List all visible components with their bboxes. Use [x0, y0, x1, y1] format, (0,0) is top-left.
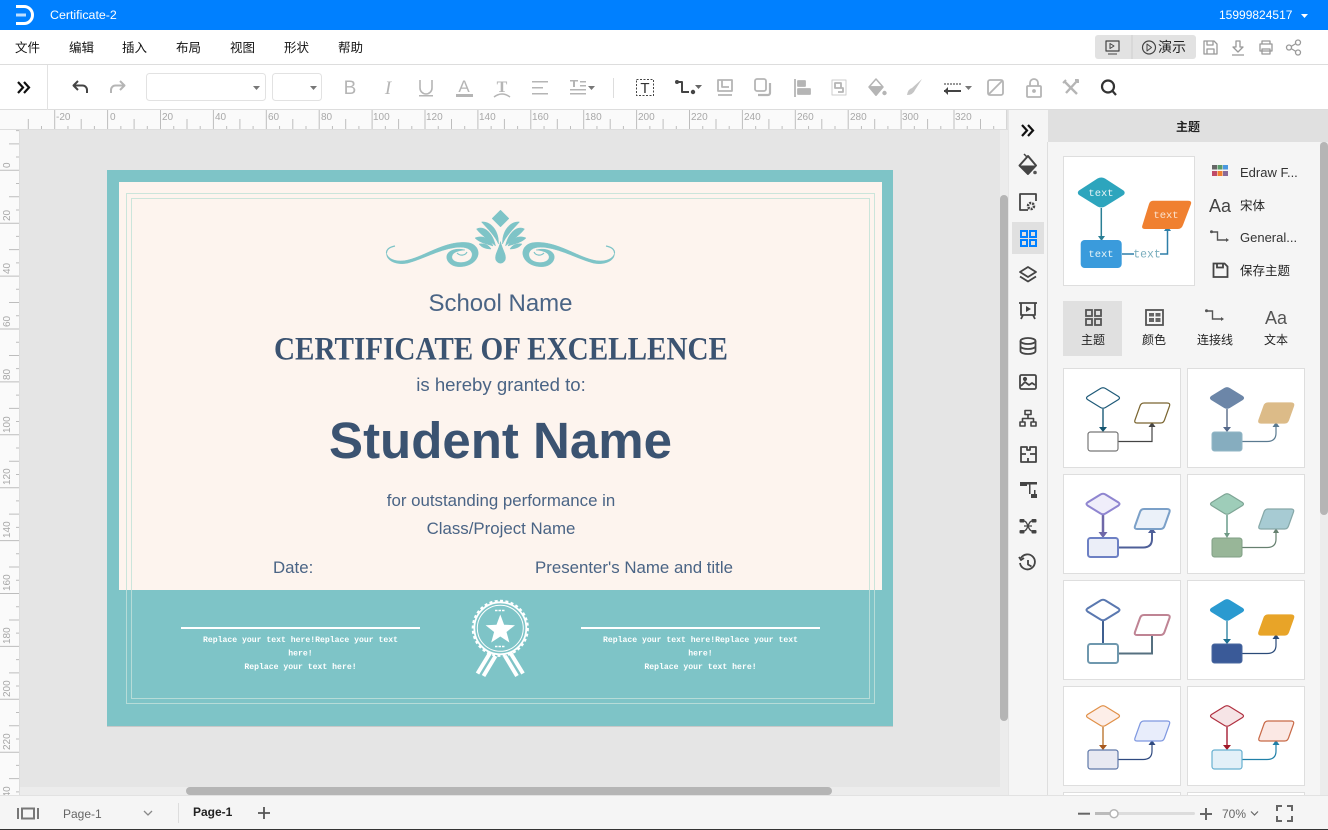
search [1102, 80, 1116, 95]
theme option: save: 保存主题 [1240, 264, 1291, 278]
left ruler [0, 130, 20, 803]
menu bar: 编辑 [69, 40, 94, 55]
theme card 4 [1188, 474, 1304, 574]
theme preview: text [1133, 248, 1161, 262]
menu bar: 视图 [230, 40, 255, 55]
right signature block [581, 627, 820, 672]
top ruler: 240 [744, 112, 761, 123]
left ruler: 240 [2, 786, 13, 803]
theme option: font: 宋体 [1240, 198, 1266, 213]
tab: text: 文本 [1264, 332, 1288, 347]
text format icons: T [497, 79, 508, 96]
top ruler: 60 [268, 112, 280, 123]
tab: theme [1063, 301, 1122, 356]
present button group: 演示 [1158, 39, 1186, 55]
cream panel [119, 182, 882, 590]
left ruler: 160 [2, 574, 13, 591]
text format icons: A [458, 77, 470, 96]
top ruler: 260 [797, 112, 814, 123]
left ruler: 100 [2, 416, 13, 433]
text format icons: I [384, 78, 393, 99]
theme preview: text [1088, 249, 1114, 261]
left signature block: Replace your text here! [244, 662, 357, 672]
left ruler: 80 [2, 368, 13, 380]
right icon column [1008, 110, 1048, 795]
left ruler: 0 [2, 162, 13, 168]
mind map icon [1020, 519, 1036, 534]
arrange icons [718, 79, 922, 97]
presentation icon [1019, 303, 1037, 319]
add page [258, 807, 270, 819]
page panel toggle [18, 808, 38, 819]
tab: connector: 连接线 [1197, 332, 1233, 347]
title bar [0, 0, 1328, 30]
document name: Certificate-2 [50, 8, 117, 22]
menu bar: 插入 [122, 41, 148, 55]
top ruler: 100 [373, 112, 390, 123]
tab: color: 颜色 [1142, 332, 1166, 347]
page settings icon [1020, 194, 1036, 210]
left ruler: 120 [2, 468, 13, 485]
top ruler: 200 [638, 112, 655, 123]
active page tab: Page-1 [193, 805, 233, 819]
floor plan icon [1021, 447, 1036, 462]
presenter label: Presenter's Name and title [535, 558, 733, 577]
theme card 1 [1064, 368, 1180, 468]
left signature block: Replace your text here!Replace your text [203, 635, 398, 645]
top ruler: 300 [902, 112, 919, 123]
top ruler: 180 [585, 112, 602, 123]
menu bar [0, 30, 1328, 65]
text format icons: B [344, 78, 356, 99]
gantt icon [1020, 482, 1037, 498]
left ruler: 60 [2, 315, 13, 327]
top ruler: -20 [56, 112, 71, 123]
text box tool: T [640, 80, 650, 97]
menu bar: 帮助 [338, 41, 363, 55]
app logo [16, 6, 32, 24]
theme option: font: Aa [1209, 196, 1232, 216]
theme option: save [1214, 264, 1291, 278]
collapse chevrons [18, 82, 29, 93]
theme card 6 [1188, 580, 1304, 680]
certificate title: CERTIFICATE OF EXCELLENCE [274, 332, 728, 368]
top ruler: 80 [321, 112, 333, 123]
theme card 5 [1064, 580, 1180, 680]
right signature block: Replace your text here! [644, 662, 757, 672]
theme card row 5 peek [1064, 792, 1304, 802]
edit, lock and tools icons [988, 79, 1078, 97]
ornament [386, 210, 615, 267]
theme card 8 [1188, 686, 1304, 786]
database icon [1020, 338, 1036, 354]
certificate [107, 170, 893, 727]
connector tool [675, 80, 702, 94]
left ruler: 220 [2, 733, 13, 750]
redo [111, 81, 124, 93]
student name: Student Name [329, 412, 672, 469]
text format icons [344, 77, 595, 99]
fullscreen [1277, 806, 1292, 821]
bottom status bar [0, 795, 1328, 830]
theme option: Edraw palette [1212, 165, 1298, 180]
layers icon [1020, 267, 1036, 282]
left ruler: 180 [2, 627, 13, 644]
left ruler: 20 [2, 209, 13, 221]
left ruler: 40 [2, 262, 13, 274]
line style icon [944, 84, 972, 95]
top ruler: 320 [955, 112, 972, 123]
top ruler: 0 [110, 112, 116, 123]
granted line: is hereby granted to: [416, 374, 586, 395]
theme card 3 [1064, 474, 1180, 574]
top ruler: 120 [426, 112, 443, 123]
menu bar: 形状 [284, 41, 310, 55]
user account: 15999824517 [1219, 8, 1293, 22]
file action icons [1204, 40, 1300, 55]
canvas scrollbars [20, 130, 1008, 795]
page selector [63, 807, 152, 821]
history icon [1019, 554, 1035, 569]
top ruler [0, 110, 1008, 130]
tab: connector [1197, 309, 1233, 347]
active theme icon [1012, 222, 1044, 254]
panel header [1048, 110, 1328, 142]
zoom controls: 70% [1222, 807, 1246, 821]
teal frame [107, 170, 893, 726]
medal badge [473, 601, 528, 676]
tab: color [1142, 310, 1166, 347]
class name: Class/Project Name [427, 519, 575, 538]
font size select [272, 74, 322, 100]
menu bar: 布局 [176, 41, 201, 55]
left signature block: here! [288, 648, 313, 658]
theme panel [1048, 110, 1328, 802]
org chart icon [1020, 410, 1036, 426]
theme preview: text [1153, 210, 1179, 222]
school name: School Name [428, 290, 573, 317]
picture icon [1020, 375, 1036, 389]
fill icon [1020, 154, 1037, 174]
top ruler: 20 [162, 112, 174, 123]
theme option: Edraw palette: Edraw F... [1240, 165, 1298, 180]
toolbar [0, 65, 1328, 110]
panel header: 主题 [1176, 119, 1200, 134]
tab: theme: 主题 [1081, 333, 1105, 347]
zoom controls [1078, 807, 1258, 821]
double border lines [126, 194, 874, 590]
font family select [146, 74, 266, 100]
tab: text [1264, 308, 1288, 347]
top ruler: 140 [479, 112, 496, 123]
theme option: connector: General... [1240, 230, 1297, 245]
panel scrollbar [1320, 142, 1328, 795]
menu bar: 文件 [15, 40, 40, 55]
theme option: connector [1210, 230, 1297, 245]
collapse panel icon [1022, 125, 1033, 136]
top ruler: 280 [850, 112, 867, 123]
left ruler: 140 [2, 521, 13, 538]
page selector: Page-1 [63, 807, 102, 821]
top ruler: 40 [215, 112, 227, 123]
tab: text: Aa [1265, 308, 1288, 328]
left ruler: 200 [2, 680, 13, 697]
performance line: for outstanding performance in [387, 491, 615, 510]
right signature block: here! [688, 648, 713, 658]
text box tool [636, 80, 654, 97]
date label: Date: [273, 558, 313, 577]
theme preview [1064, 156, 1194, 286]
theme card 2 [1188, 368, 1304, 468]
left signature block [181, 627, 420, 672]
top ruler: 160 [532, 112, 549, 123]
undo [74, 81, 87, 93]
present button group [1095, 35, 1196, 59]
top ruler: 220 [691, 112, 708, 123]
theme card 7 [1064, 686, 1180, 786]
right signature block: Replace your text here!Replace your text [603, 635, 798, 645]
theme preview: text [1088, 188, 1114, 200]
theme option: font [1209, 196, 1266, 216]
